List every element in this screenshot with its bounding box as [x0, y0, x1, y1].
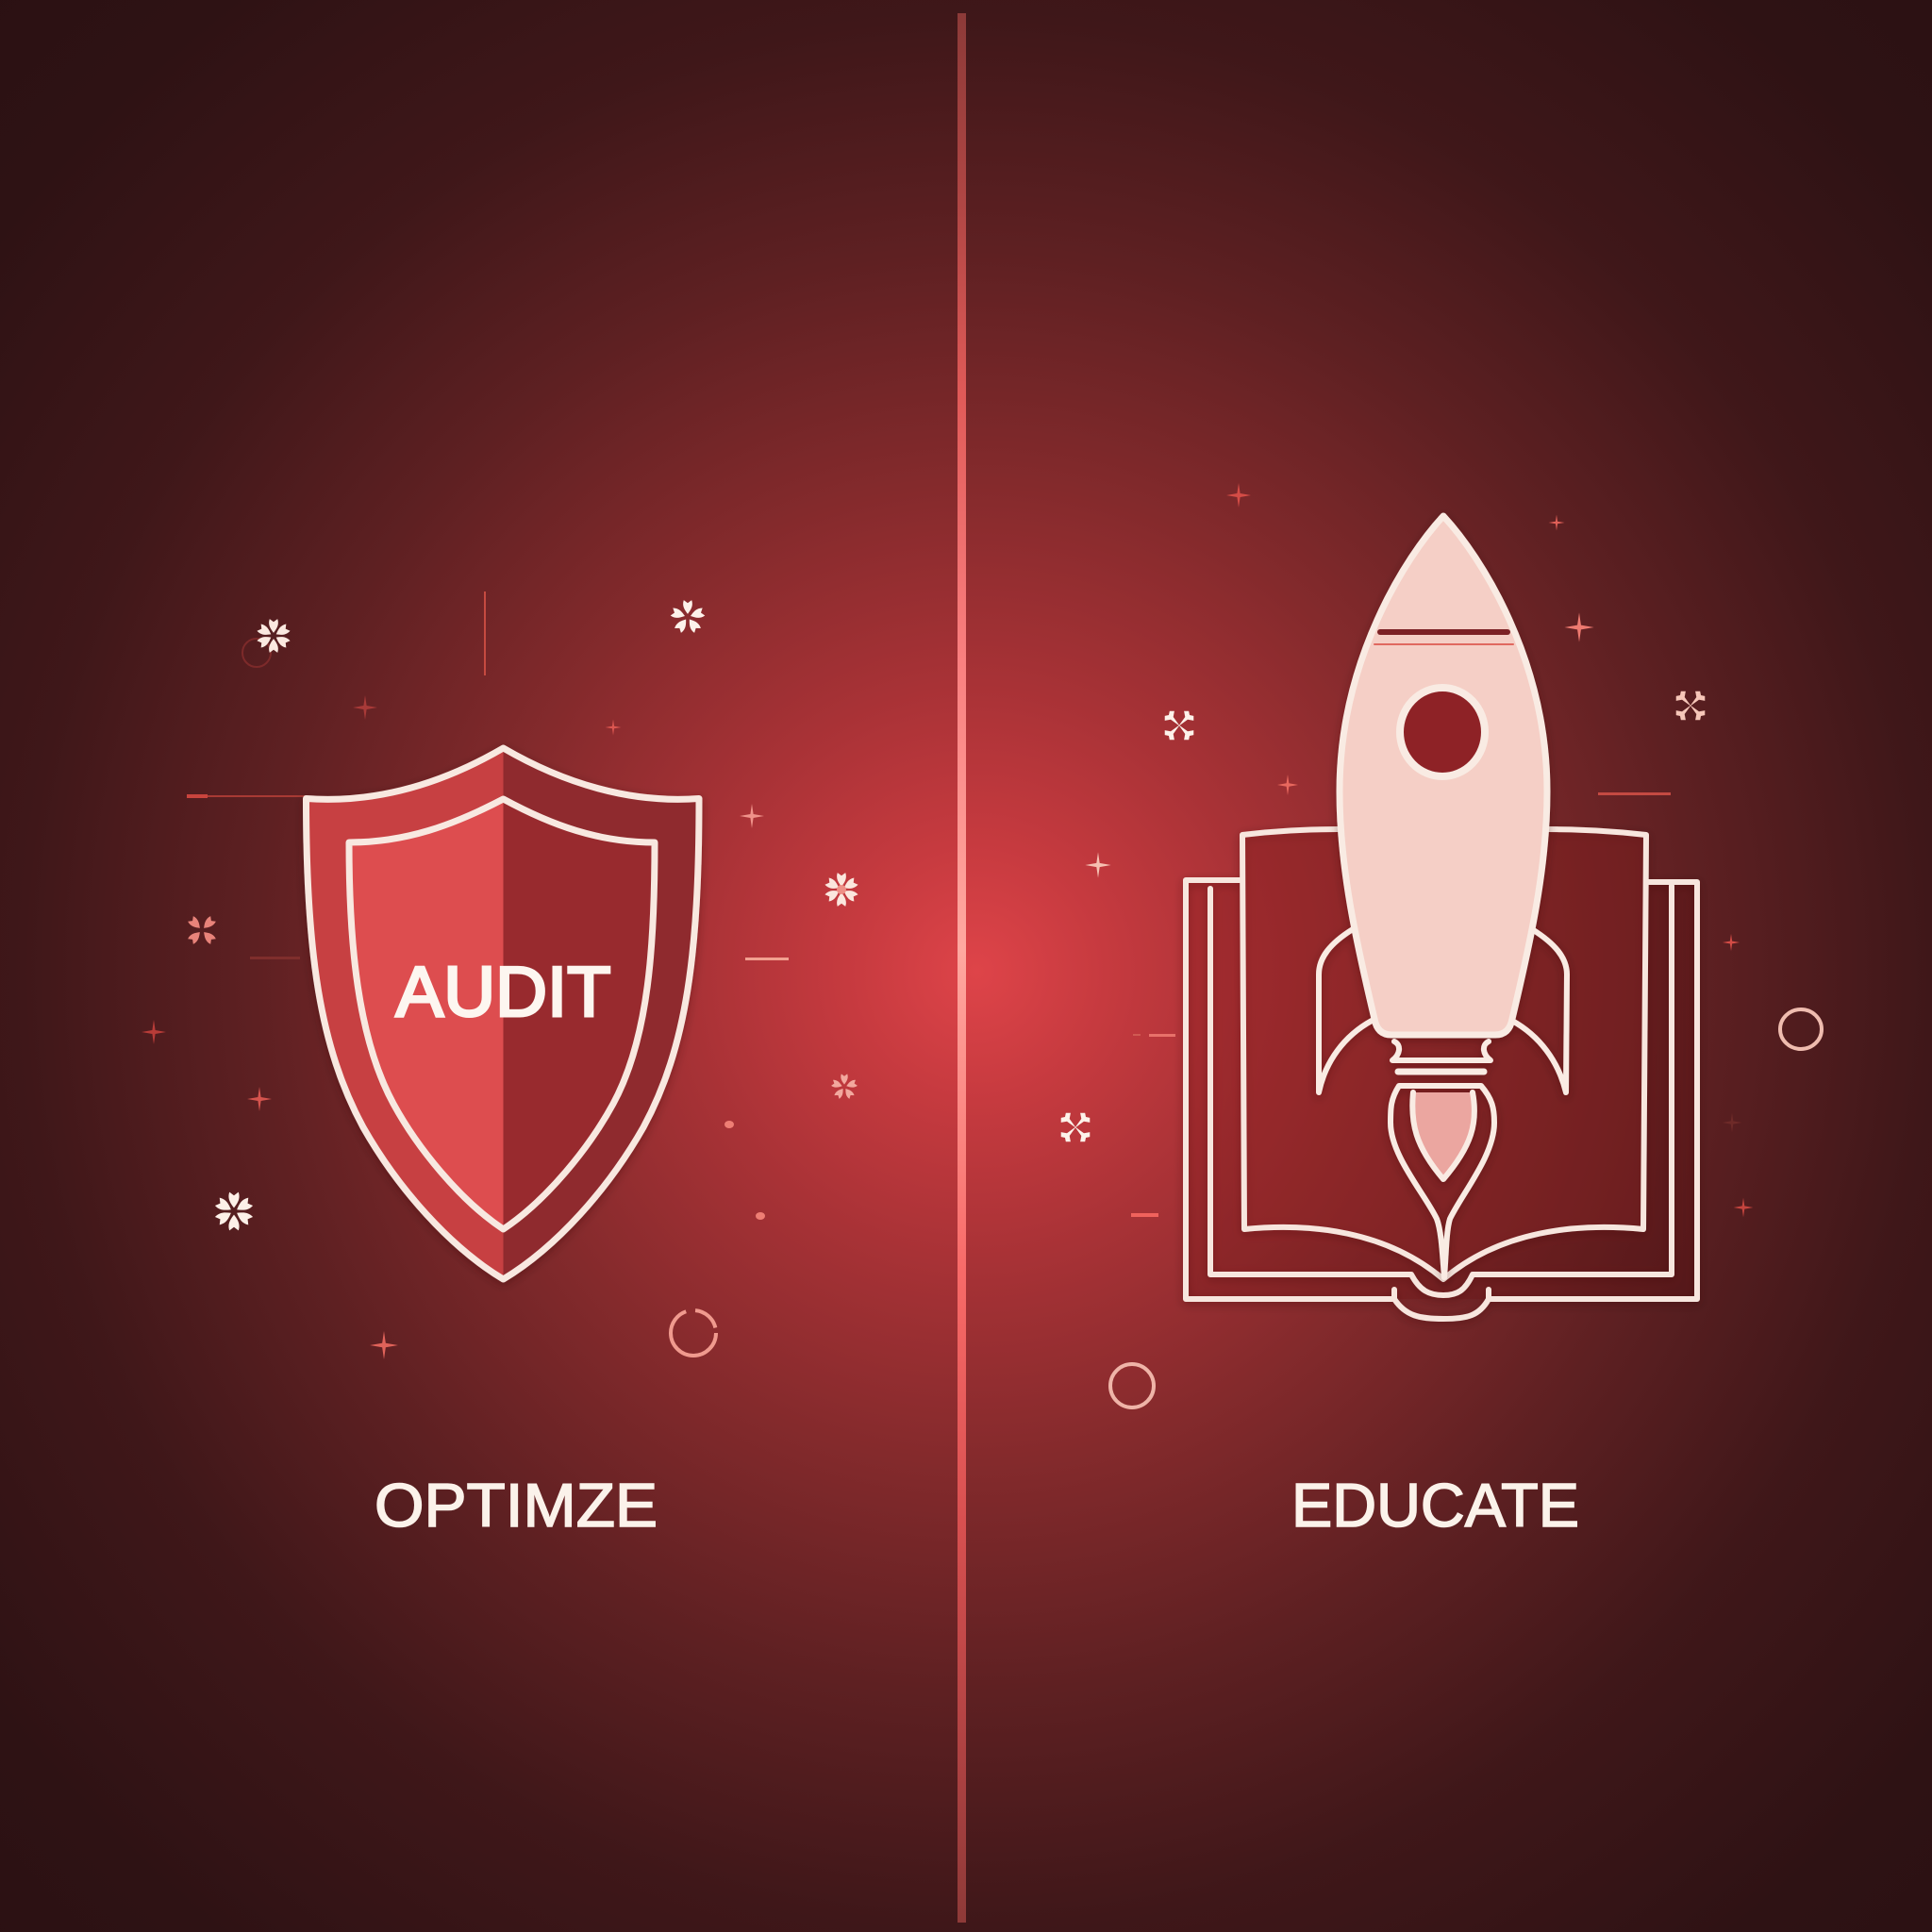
rocket flame inner: [1412, 1092, 1474, 1179]
right caption: EDUCATE: [1291, 1471, 1579, 1540]
left caption: OPTIMZE: [375, 1471, 658, 1540]
right panel: rocket and book with sparkles: [1058, 483, 1822, 1407]
icon: shield: [306, 748, 699, 1279]
rocket nose band: [1380, 629, 1507, 635]
shield label: AUDIT: [396, 952, 611, 1031]
decorative dashes: [1131, 792, 1671, 1217]
shield inner outline: [349, 799, 655, 1229]
book back pages: [1186, 880, 1697, 1319]
icon: rocket: [1319, 516, 1567, 1277]
rocket nozzle: [1392, 1041, 1491, 1072]
rocket flame outer: [1391, 1086, 1494, 1277]
ring ornament: [671, 1310, 716, 1356]
sparkle group left: [142, 600, 858, 1359]
left panel: shield with sparkles: [142, 591, 858, 1359]
shield outer outline: [306, 748, 699, 1279]
center divider line: [958, 13, 966, 1923]
ring ornament right: [1780, 1009, 1822, 1049]
shield left half fill: [309, 752, 504, 1275]
icon: open book: [1186, 829, 1697, 1319]
rocket window: [1400, 688, 1485, 776]
book inner page line: [1210, 886, 1672, 1295]
ring ornament lower left: [1110, 1364, 1154, 1407]
rocket fins: [1319, 929, 1567, 1092]
rocket thin line: [1374, 643, 1513, 645]
decorative vertical line above shield: [484, 591, 486, 675]
book side strip tint: [1186, 880, 1697, 1299]
book bottom lug: [1394, 1290, 1489, 1299]
rocket body: [1340, 516, 1547, 1035]
decorative horizontal lines: [187, 794, 789, 960]
sparkle group right: [1058, 483, 1753, 1217]
shield right half fill: [504, 752, 696, 1275]
book front page: [1242, 829, 1646, 1279]
